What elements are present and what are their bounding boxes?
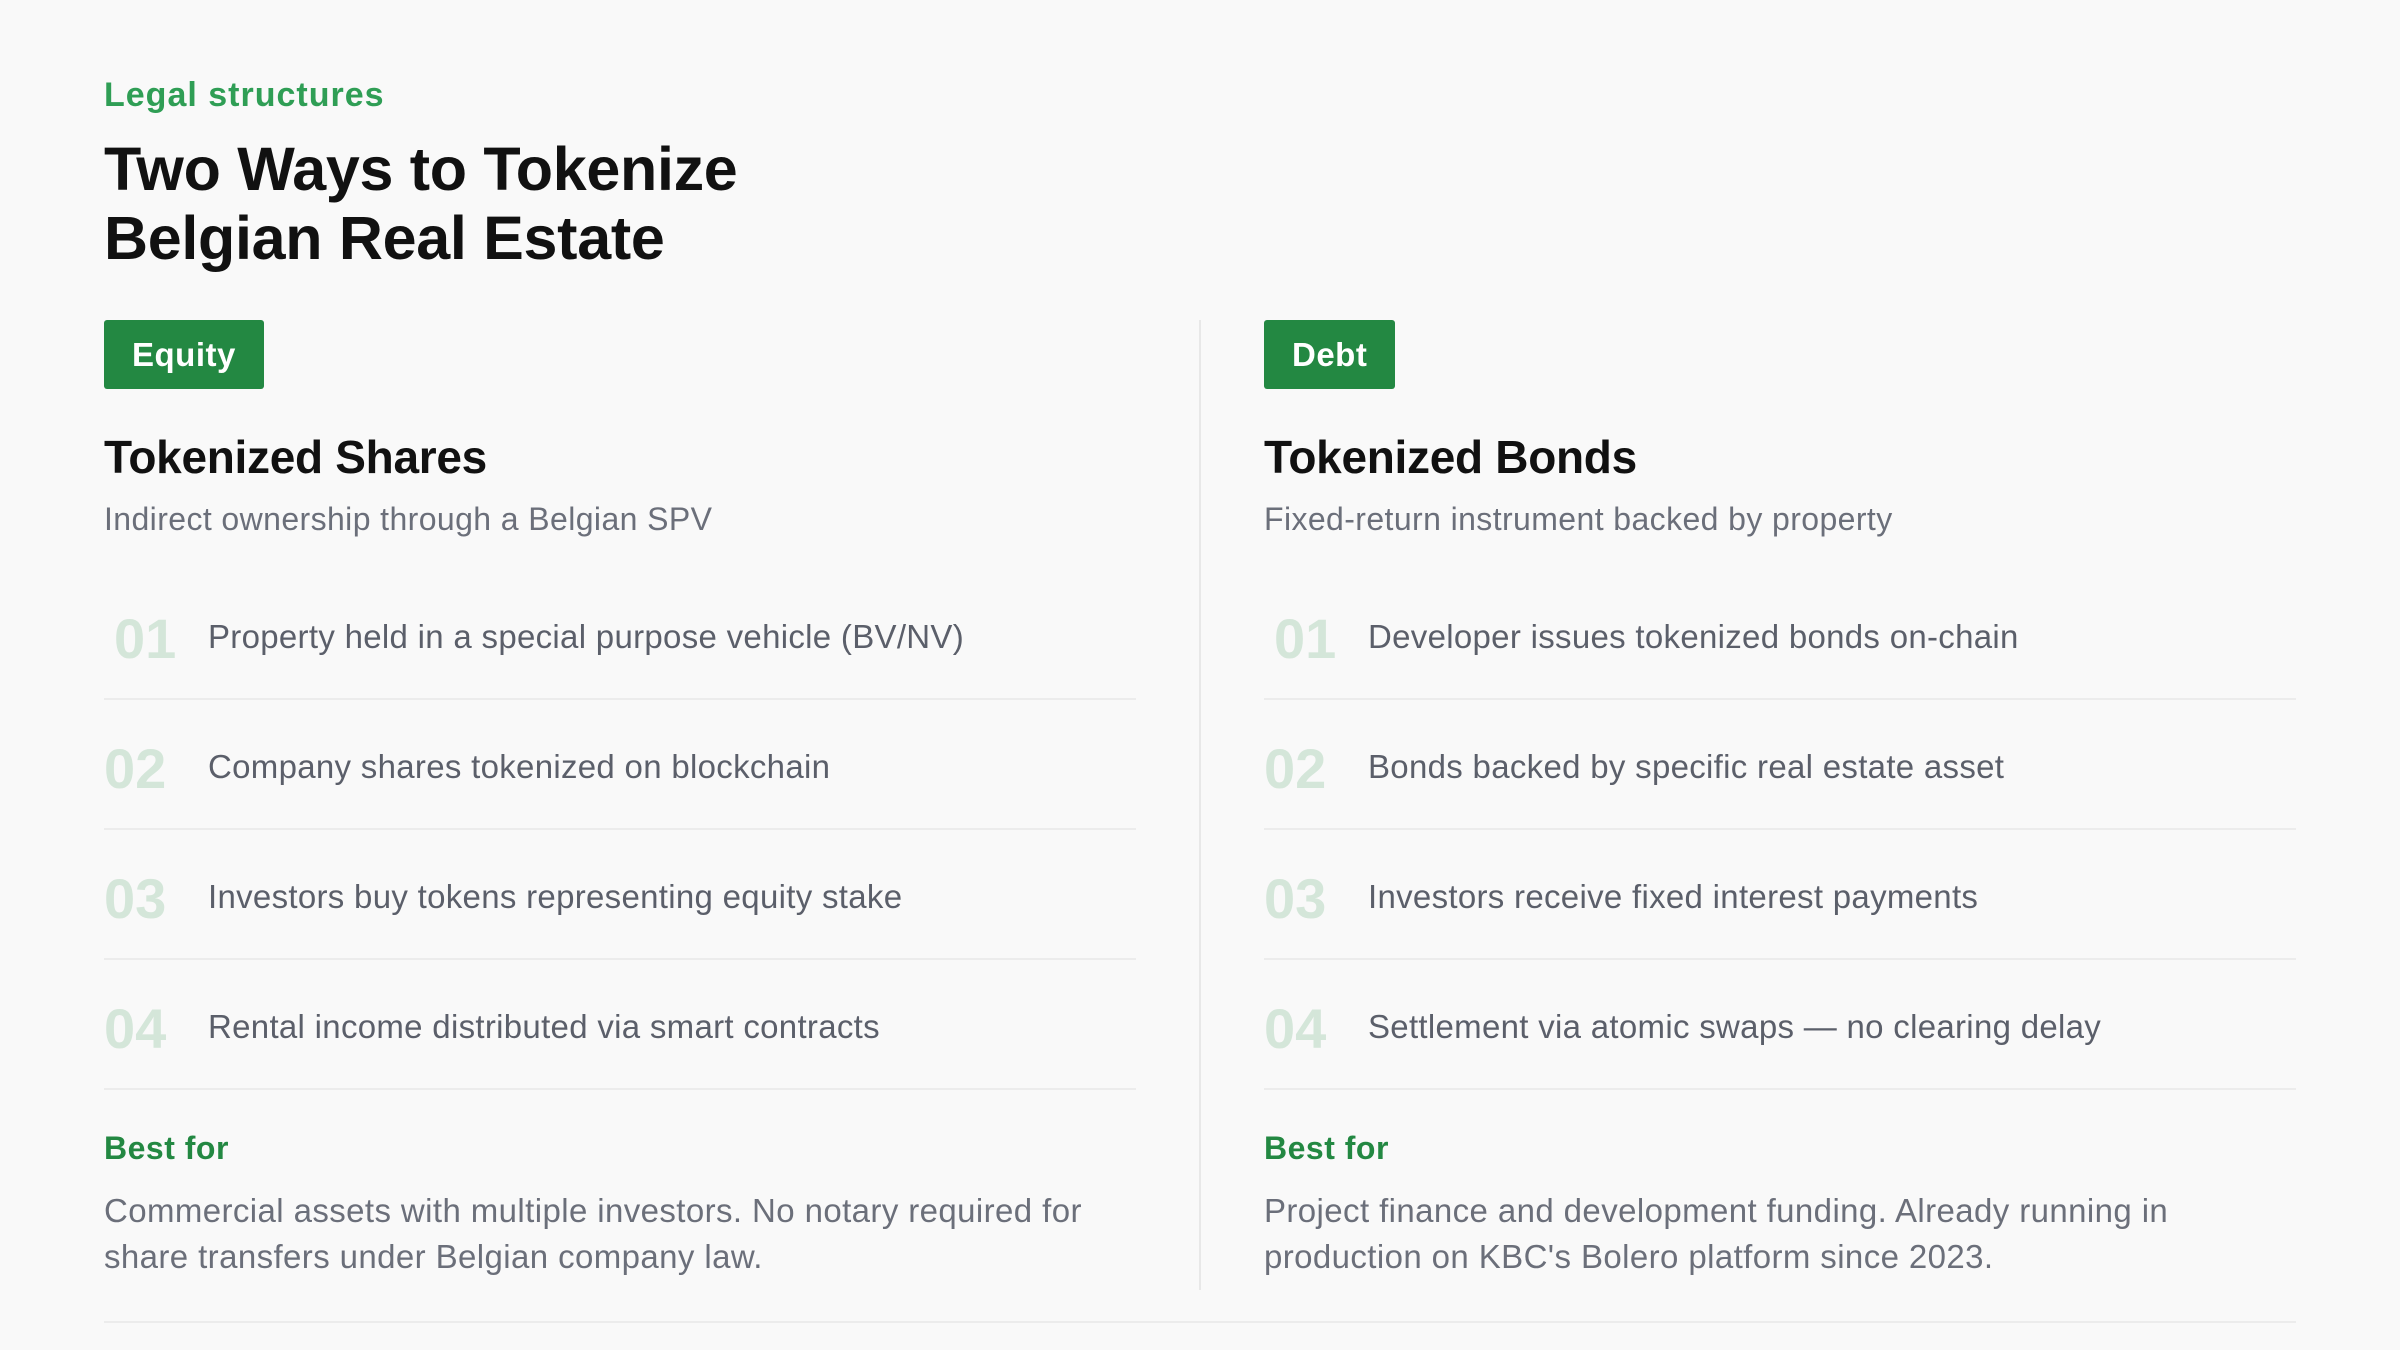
title <box>104 135 737 272</box>
badge: equity: Equity <box>132 336 236 373</box>
best for label: Best for <box>104 1130 229 1166</box>
best for text <box>104 1192 1082 1275</box>
step 03: Investors receive fixed interest payments <box>1368 878 1978 915</box>
step 01 <box>1264 570 2296 700</box>
step 03: 03 <box>1264 867 1326 930</box>
step 03: Investors buy tokens representing equity stake <box>208 878 902 915</box>
step 01: Developer issues tokenized bonds on-chain <box>1368 618 2019 655</box>
step 02 <box>1264 700 2296 830</box>
vertical divider <box>1199 320 1201 1290</box>
step 01: 01 <box>114 607 176 670</box>
step 04 <box>1264 960 2296 1090</box>
step 03 <box>104 830 1136 960</box>
title: Belgian Real Estate <box>104 204 664 272</box>
step 03: 03 <box>104 867 166 930</box>
step 02: Company shares tokenized on blockchain <box>208 748 830 785</box>
subtitle: Fixed-return instrument backed by property <box>1264 501 1893 537</box>
title: Two Ways to Tokenize <box>104 135 737 203</box>
best for text: production on KBC's Bolero platform since 2023. <box>1264 1238 1994 1275</box>
badge: debt <box>1264 320 1395 389</box>
badge: debt: Debt <box>1292 336 1367 373</box>
step 02: 02 <box>104 737 166 800</box>
best for text: Project finance and development funding. Already running in <box>1264 1192 2168 1229</box>
badge: equity <box>104 320 264 389</box>
panel: equity <box>104 320 1136 1275</box>
subtitle: Indirect ownership through a Belgian SPV <box>104 501 712 537</box>
heading: tokenized shares: Tokenized Shares <box>104 431 487 483</box>
best for label: Best for <box>1264 1130 1389 1166</box>
step 03 <box>1264 830 2296 960</box>
panel: debt <box>1264 320 2296 1275</box>
best for text <box>1264 1192 2168 1275</box>
bottom rule <box>104 1321 2296 1323</box>
heading: tokenized bonds: Tokenized Bonds <box>1264 431 1637 483</box>
step 04: Rental income distributed via smart contracts <box>208 1008 880 1045</box>
kicker: Legal structures <box>104 76 385 114</box>
step 04: 04 <box>1264 997 1326 1060</box>
step 01: Property held in a special purpose vehicle (BV/NV) <box>208 618 964 655</box>
step 04: Settlement via atomic swaps — no clearing delay <box>1368 1008 2101 1045</box>
step 02: 02 <box>1264 737 1326 800</box>
best for text: Commercial assets with multiple investors. No notary required for <box>104 1192 1082 1229</box>
step 02: Bonds backed by specific real estate asset <box>1368 748 2004 785</box>
best for text: share transfers under Belgian company law. <box>104 1238 763 1275</box>
step 04: 04 <box>104 997 166 1060</box>
step 04 <box>104 960 1136 1090</box>
step 01: 01 <box>1274 607 1336 670</box>
step 01 <box>104 570 1136 700</box>
step 02 <box>104 700 1136 830</box>
